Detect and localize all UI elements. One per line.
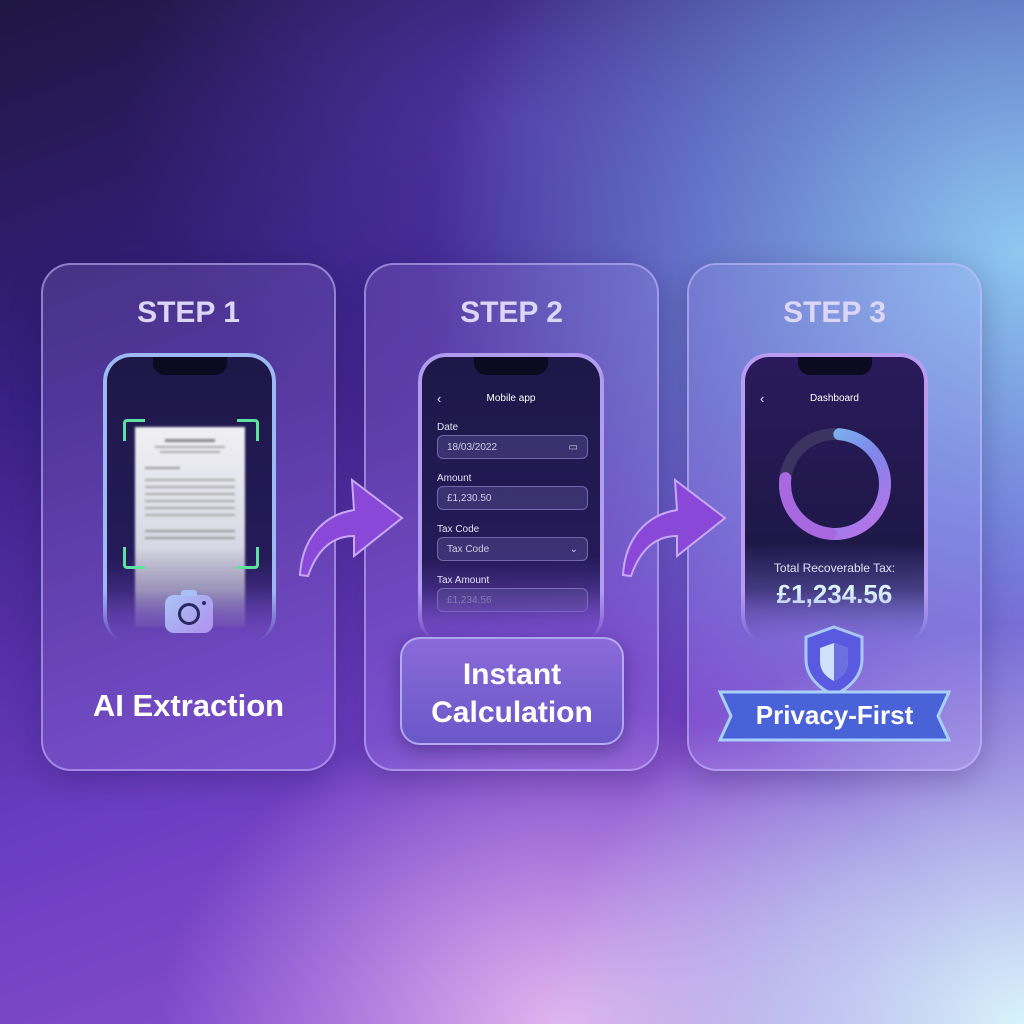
phone: mobile app form: £1,234.56 <box>447 595 492 606</box>
heading: step 2: STEP 2 <box>460 296 563 329</box>
scan frame <box>123 419 259 569</box>
phone: dashboard: Dashboard <box>810 393 859 404</box>
heading: step 1: STEP 1 <box>137 296 240 329</box>
phone: dashboard: £1,234.56 <box>777 579 892 609</box>
phone: mobile app form: Tax Code <box>447 544 489 555</box>
phone: mobile app form: Mobile app <box>487 393 535 404</box>
arrow: step 2 to 3 <box>622 478 726 578</box>
arrow: step 1 to 2 <box>299 478 404 578</box>
phone: mobile app form: ‹ <box>437 391 441 406</box>
callout: Instant Calculation <box>400 637 624 745</box>
phone: mobile app form: ⌄ <box>570 544 578 555</box>
callout: Instant Calculation: Instant <box>463 658 561 691</box>
icon: shield <box>804 626 864 690</box>
phone: mobile app form: Date <box>437 422 458 433</box>
panel: step 3 <box>687 263 982 771</box>
phone: mobile app form: 18/03/2022 <box>447 442 497 453</box>
receipt <box>135 427 245 627</box>
phone: dashboard: Total Recoverable Tax: <box>774 561 895 575</box>
icon: camera <box>165 595 213 633</box>
phone: dashboard <box>741 353 928 643</box>
phone: mobile app form <box>418 353 604 643</box>
phone: mobile app form: Amount <box>437 473 471 484</box>
phone: dashboard: ‹ <box>760 391 764 406</box>
heading: step 3: STEP 3 <box>783 296 886 329</box>
banner: Privacy-First: Privacy-First <box>756 700 913 730</box>
phone: mobile app form: £1,230.50 <box>447 493 492 504</box>
phone: mobile app form: Tax Code <box>437 524 479 535</box>
text: AI Extraction: AI Extraction <box>93 688 284 723</box>
panel: step 2 <box>364 263 659 771</box>
callout: Instant Calculation: Calculation <box>431 696 593 729</box>
donut chart <box>779 428 891 540</box>
phone: mobile app form: ▭ <box>569 442 578 453</box>
panel: step 1 <box>41 263 336 771</box>
banner: Privacy-First <box>718 690 951 742</box>
phone: receipt scan <box>103 353 276 643</box>
phone: mobile app form: Tax Amount <box>437 575 489 586</box>
